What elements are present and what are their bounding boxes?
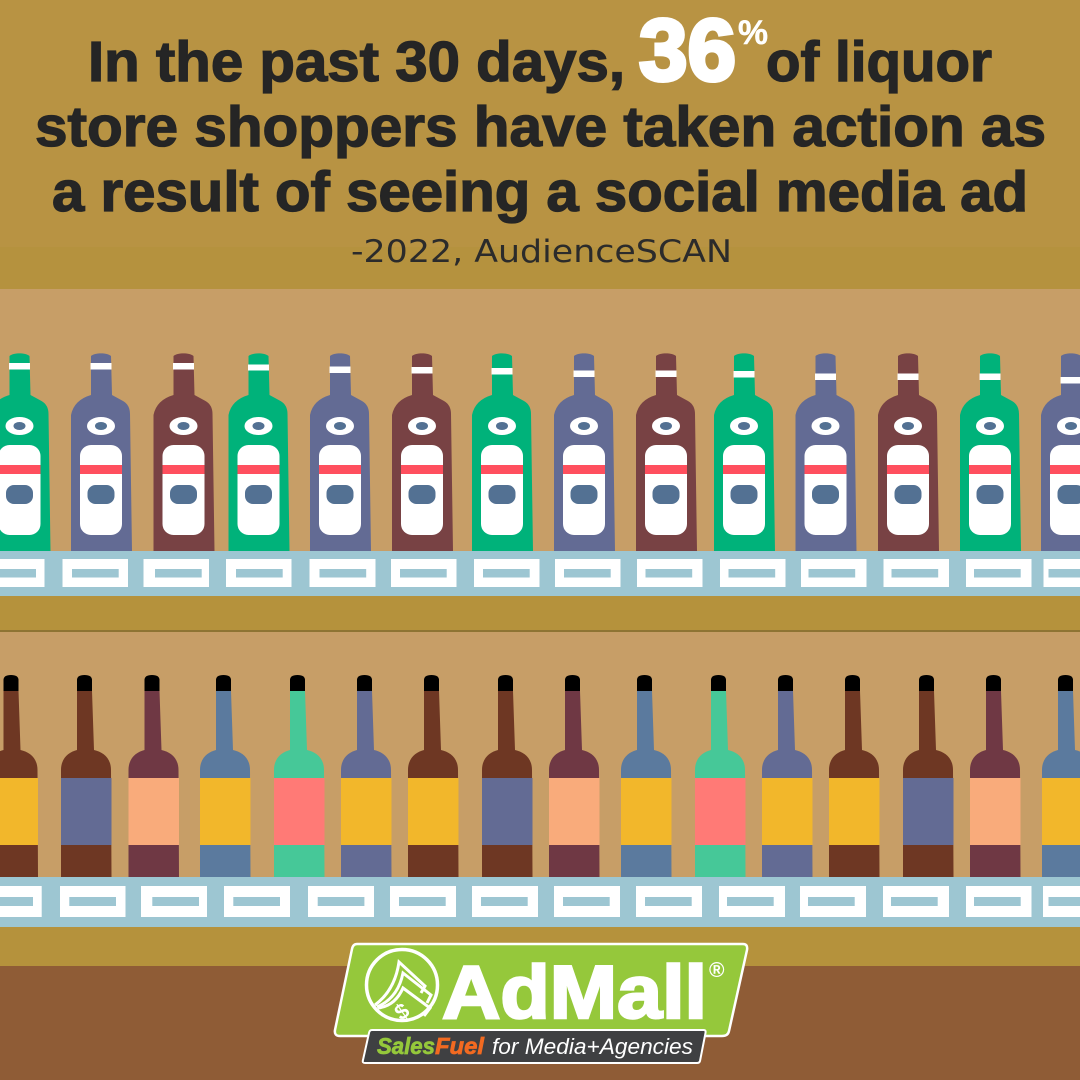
- bottle: brown, purple label: [903, 675, 954, 877]
- background: top shelf lower board: [0, 596, 1080, 632]
- title: of liquor: [766, 30, 992, 94]
- bottle: brown, yellow label: [829, 675, 880, 877]
- bottle: blue, yellow label: [621, 675, 672, 877]
- title: a result of seeing a social media ad: [52, 160, 1028, 224]
- SalesFuel brand: Fuel: [435, 1033, 485, 1059]
- bottle: blue, yellow label: [1042, 675, 1080, 877]
- bottle: green, coral label: [695, 675, 746, 877]
- dark tagline bar: [363, 1030, 706, 1063]
- tagline: for Media+Agencies: [492, 1034, 693, 1059]
- key figure: 36%: 36: [639, 2, 736, 99]
- bottle: maroon: [392, 353, 453, 551]
- icon: circled money bills: $: [390, 998, 414, 1025]
- title: In the past 30 days,: [88, 30, 625, 94]
- bottom shelf rail: [0, 877, 1080, 927]
- background: bottom shelf lower board: [0, 927, 1080, 966]
- bottle: purple: [554, 353, 615, 551]
- bottle: maroon, peach label: [549, 675, 600, 877]
- bottle: green: [714, 353, 775, 551]
- bottle: brown, purple label: [482, 675, 532, 877]
- background: shelf wall: [0, 289, 1080, 966]
- source line: -2022, AudienceSCAN: [351, 234, 732, 270]
- bottle: green: [472, 353, 533, 551]
- bottom shelf bottles: [0, 675, 1080, 877]
- wordmark: AdMall: [442, 950, 707, 1034]
- bottle: green, coral label: [274, 675, 324, 877]
- SalesFuel brand: [377, 1033, 485, 1059]
- logo: AdMall: [335, 944, 747, 1063]
- bottle: green: [0, 353, 50, 551]
- bottle: purple: [796, 353, 856, 551]
- background: floor: [0, 966, 1080, 1080]
- title: store shoppers have taken action as: [35, 95, 1046, 159]
- bottle: purple: [71, 353, 132, 551]
- title: [35, 2, 1046, 224]
- bottle: purple, yellow label: [762, 675, 812, 877]
- bottle: purple: [1041, 353, 1080, 551]
- SalesFuel brand: Sales: [377, 1033, 435, 1059]
- background: header band: [0, 0, 1080, 289]
- top shelf rail: [0, 551, 1080, 596]
- bottle: brown, purple label: [61, 675, 112, 877]
- bottle: purple: [310, 353, 371, 551]
- bottle: maroon, peach label: [128, 675, 179, 877]
- top shelf bottles: [0, 353, 1080, 551]
- bottle: maroon: [636, 353, 697, 551]
- key figure: 36%: %: [738, 14, 768, 52]
- bottle: green: [960, 353, 1021, 551]
- registered mark: ®: [709, 959, 725, 982]
- bottle: maroon, peach label: [970, 675, 1020, 877]
- logo green badge: [335, 944, 747, 1036]
- bottle: maroon: [878, 353, 939, 551]
- bottle: brown, yellow label: [408, 675, 458, 877]
- bottle: purple, yellow label: [341, 675, 392, 877]
- bottle: maroon: [154, 353, 214, 551]
- icon: circled money bills: [366, 950, 438, 1025]
- bottle: brown, yellow label: [0, 675, 38, 877]
- bottle: blue, yellow label: [200, 675, 250, 877]
- bottle: green: [228, 353, 290, 551]
